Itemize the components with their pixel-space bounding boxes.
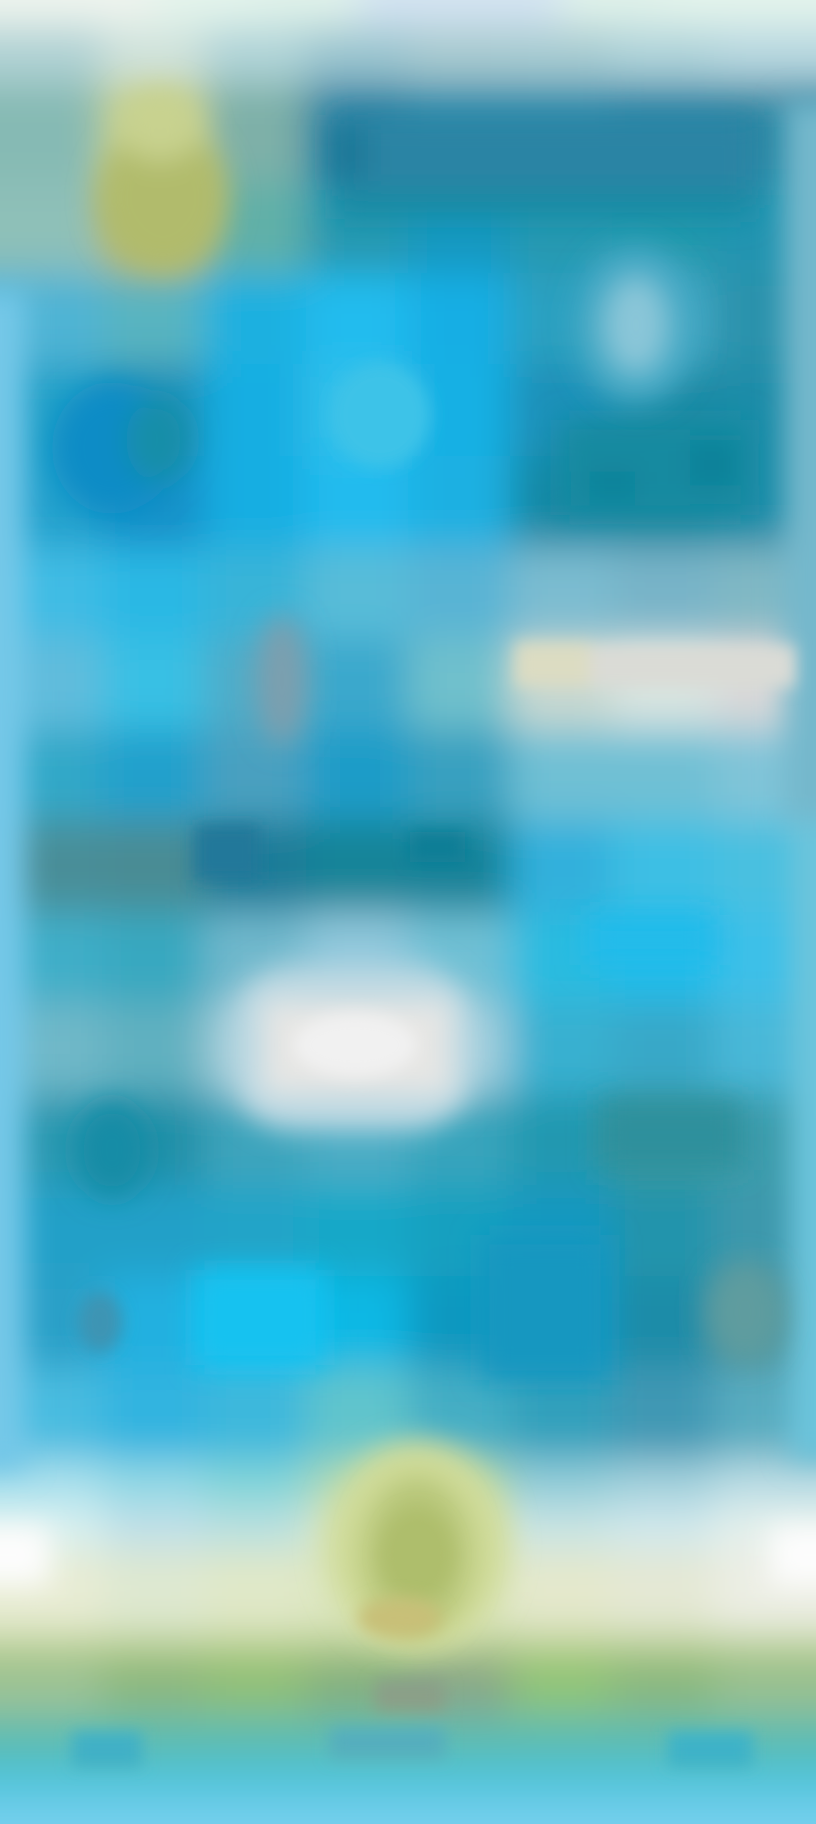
white side corners [0,1525,816,1585]
left edge strip [0,290,26,1470]
icon: yellow-green central badge [325,1440,509,1650]
icon: right panel highlight [574,245,698,405]
panel: white callout [232,965,472,1130]
panel: pale callout bar [515,642,795,687]
icon: bottom-left tab [72,1732,142,1767]
panel: teal speech block [598,1100,743,1170]
icon: small round marker [78,1292,122,1352]
bottom centre label [330,1680,445,1758]
panel: dark horizontal banner [195,825,465,880]
panel: title block [328,115,755,218]
icon: lower-left circle [74,1102,150,1198]
grey vertical marker [256,614,308,746]
panel: yellow badge [97,89,229,272]
icon: central circle [330,363,430,467]
right edge strip [784,100,816,1460]
panel: mid-right blue highlight [585,915,715,965]
icon: right grey marker [707,1262,783,1362]
panel: left blue circle [52,382,190,514]
panel: bright blue chart area [195,1235,610,1380]
panel: right dark panel [560,420,750,515]
icon: bottom-right tab [668,1732,753,1767]
